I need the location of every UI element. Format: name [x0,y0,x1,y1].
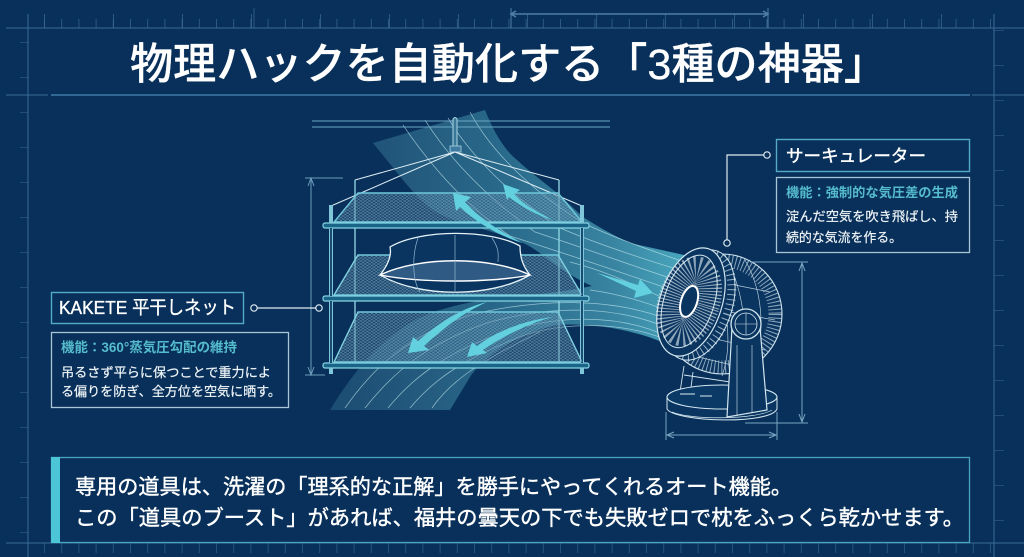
dimension: fan width [666,412,777,440]
panel: summary callout: 専用の道具は、洗濯の「理系的な正解」を勝手にやってくれるオート機能。 [75,476,792,499]
dimension: rack height [305,178,343,375]
panel: net function [52,332,288,408]
back posts [355,180,559,365]
airflow arrows [408,184,653,357]
base [667,396,777,420]
streamlines [345,112,684,408]
airflow stream [330,110,693,410]
title underline [51,94,970,96]
air band [330,110,693,410]
panel: net function: 吊るさず平らに保つことで重力によ [61,365,271,380]
flat drying net rack [312,118,610,374]
arrow toward fan [597,273,653,298]
panel: net function: る偏りを防ぎ、全方位を空気に晒す。 [61,384,281,399]
dimension: fan height [745,262,808,423]
panel: circulator function: 続的な気流を作る。 [786,230,902,245]
stand legs [680,366,730,395]
arrow down left 1 [408,302,487,353]
stand pillar [727,327,767,417]
middle shelf [334,255,582,295]
dimension arrow: top [511,8,768,28]
hanging rail [312,121,610,127]
label: circulator title [776,140,970,172]
arrow up left 1 [453,193,522,243]
connector: fan [724,152,770,246]
pillow [380,233,530,293]
panel: circulator function: 機能：強制的な気圧差の生成 [786,184,958,200]
panel: circulator function [776,178,970,252]
panel: net function: 機能：360°蒸気圧勾配の維持 [61,339,237,355]
circulator fan [644,239,782,420]
label: KAKETE net title: KAKETE 平干しネット [59,297,236,318]
hanging strings [331,152,582,206]
front grille ring [644,239,738,365]
hook post [453,118,457,150]
connector: net [251,305,322,311]
title: 物理ハックを自動化する「3種の神器」 [130,41,887,89]
panel: summary callout [51,457,970,543]
label: KAKETE net title [52,292,244,324]
label: circulator title: サーキュレーター [786,146,926,166]
panel: circulator function: 淀んだ空気を吹き飛ばし、持 [786,209,958,224]
top shelf [334,193,582,222]
front posts [331,205,582,374]
panel: summary callout: この「道具のブースト」があれば、福井の曇天の下でも失敗ゼロで枕をふっくら乾かせます。 [75,507,964,530]
bottom shelf [334,312,582,362]
rear housing [662,254,782,374]
arrow up left 2 [503,184,553,220]
bezel band [650,241,748,369]
arrow down left 2 [467,317,553,357]
